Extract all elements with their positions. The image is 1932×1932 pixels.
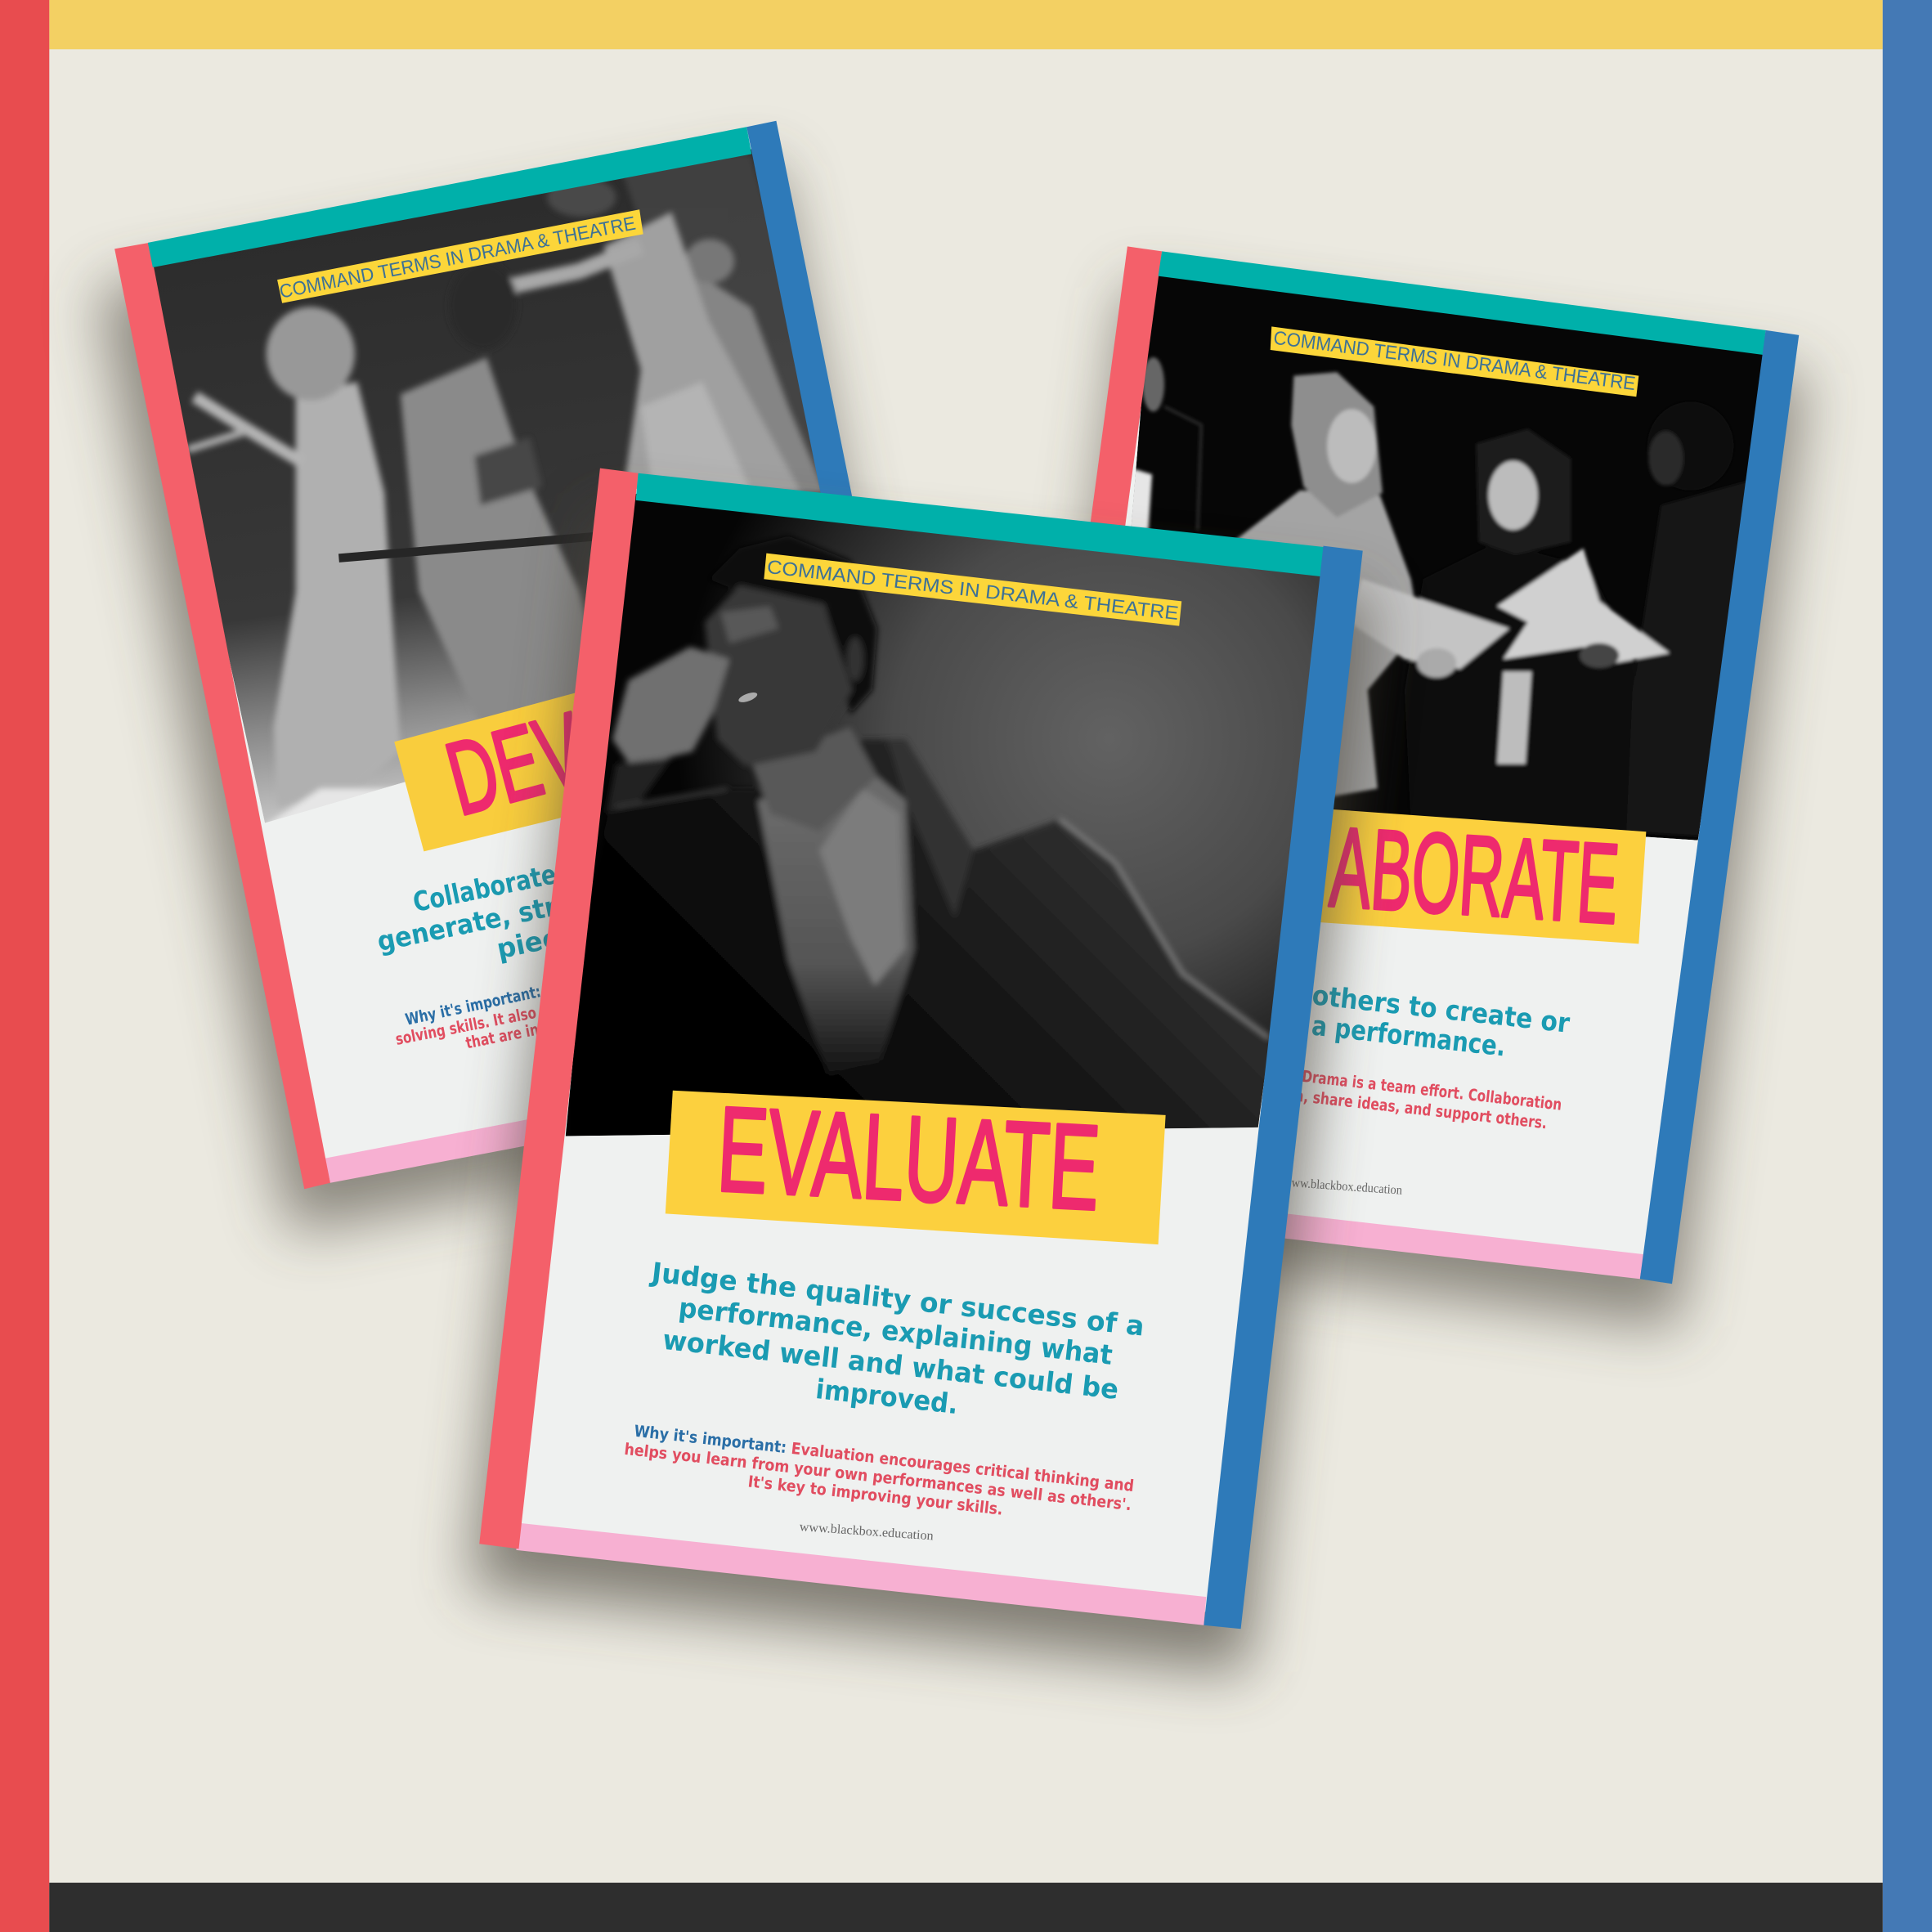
frame: left strip, top strip, right strip, bottom strip <box>114 121 966 1189</box>
poster: evaluate (front) <box>471 468 1370 1674</box>
definition text <box>648 1256 1146 1420</box>
photo: three costumed performers <box>154 149 821 823</box>
definition text: worked well and what could be <box>661 1324 1120 1405</box>
why it's important text <box>394 982 542 1052</box>
why it's important text: solving skills. It also <box>394 1003 538 1049</box>
heading banner: evaluate <box>666 1082 1166 1244</box>
definition text: performance, explaining what <box>677 1292 1114 1371</box>
definition text: Judge the quality or success of a <box>648 1256 1146 1343</box>
why it's important text: helps you learn from your own performances as well as others'. <box>623 1440 1132 1514</box>
definition text: improved. <box>814 1373 960 1420</box>
heading banner: collaborate: ABORATE <box>1327 804 1622 948</box>
bottom dark border <box>49 1883 1883 1932</box>
heading banner: collaborate: COLL <box>1145 785 1300 921</box>
why it's important text: Why it's important: <box>404 982 542 1029</box>
definition text <box>374 858 561 965</box>
header label: COMMAND TERMS IN DRAMA & THEATRE <box>766 556 1180 624</box>
why it's important text: Drama is a team effort. Collaboration <box>1301 1067 1562 1114</box>
heading banner: evaluate: EVALUATE <box>715 1082 1103 1235</box>
website url: ww.blackbox.education <box>1291 1176 1403 1198</box>
heading banner: devise <box>394 663 697 851</box>
header label: COMMAND TERMS IN DRAMA & THEATRE <box>278 213 637 303</box>
heading banner: devise: DEVISE <box>435 663 697 837</box>
why it's important text: that are in <box>464 1020 540 1052</box>
photo: three actors reading scripts <box>1109 271 1768 840</box>
why it's important text <box>1293 1067 1562 1132</box>
why it's important text: n, share ideas, and support others. <box>1293 1086 1548 1132</box>
photo: shouting actor <box>566 493 1331 1140</box>
definition text: Collaborate <box>410 858 559 918</box>
left red border <box>0 0 49 1932</box>
definition text: others to create or <box>1311 979 1571 1039</box>
why it's important text: It's key to improving your skills. <box>747 1472 1004 1519</box>
right blue border <box>1883 0 1932 1932</box>
frame: left strip, top strip, right strip, bottom strip <box>479 468 1363 1629</box>
definition text: a performance. <box>1311 1010 1507 1062</box>
top yellow border <box>49 0 1883 49</box>
website url: www.blackbox.education <box>799 1520 934 1543</box>
header label: COMMAND TERMS IN DRAMA & THEATRE <box>1272 327 1637 394</box>
heading banner: collaborate <box>1109 785 1646 948</box>
definition text: generate, str <box>374 890 560 957</box>
definition text <box>1311 979 1571 1062</box>
definition text: piec <box>494 921 561 965</box>
why it's important text: Why it's important: Evaluation encourages critical thinking and <box>633 1422 1135 1495</box>
poster: devise (back left) <box>99 121 966 1232</box>
poster: collaborate (back right) <box>1001 246 1805 1329</box>
frame: left strip, top strip, right strip, bottom strip <box>1001 246 1799 1284</box>
